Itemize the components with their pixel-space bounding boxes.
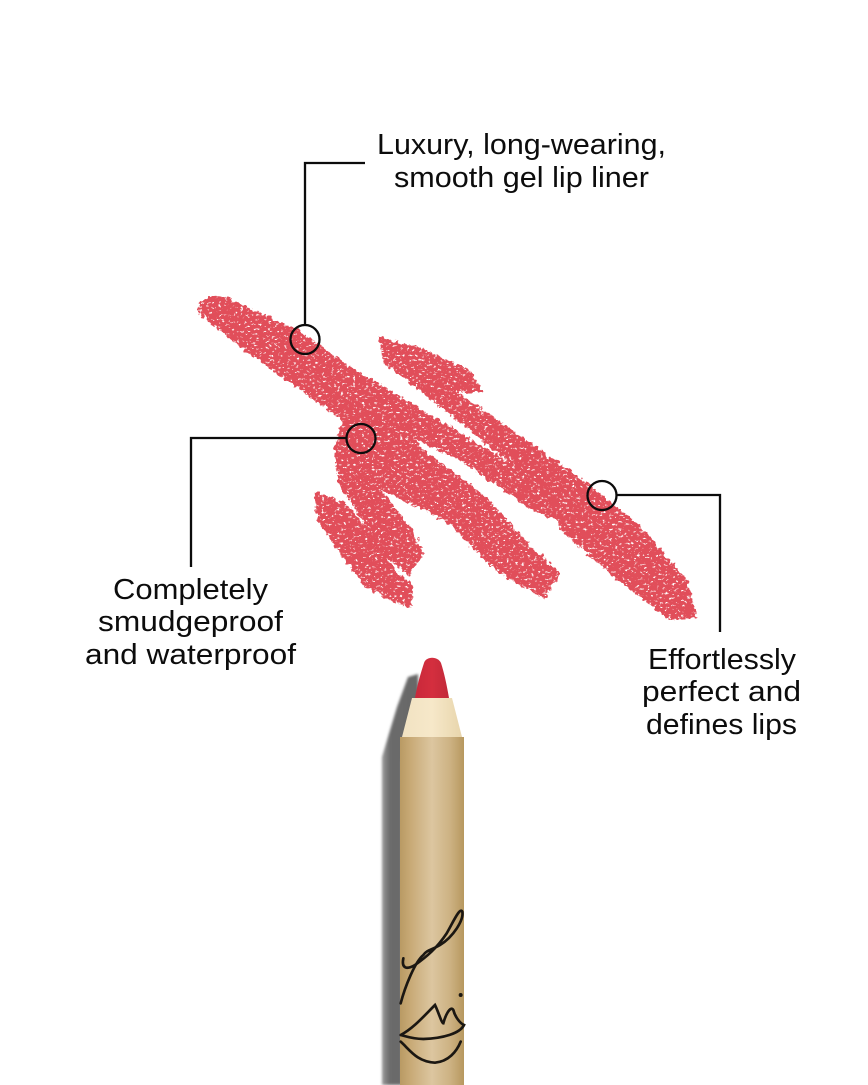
lip liner swatch: [198, 297, 697, 620]
callout text: smudgeproof: [98, 606, 284, 638]
callout text: smooth gel lip liner: [394, 162, 649, 194]
callout text: Completely: [113, 574, 269, 606]
callout text: and waterproof: [85, 639, 297, 671]
callout: luxury gel lip liner: [290, 129, 666, 354]
leader line and marker: [191, 424, 376, 567]
leader line and marker: [588, 481, 720, 632]
callout: smudgeproof and waterproof: [85, 424, 376, 671]
lip liner pencil: [382, 658, 464, 1085]
leader line and marker: [290, 163, 365, 354]
pencil wood: [402, 698, 462, 737]
callout text: perfect and: [642, 676, 801, 708]
callout text: [85, 574, 297, 671]
callout text: [377, 129, 666, 194]
callout text: defines lips: [646, 709, 797, 741]
pencil gold body: [400, 737, 464, 1085]
callout: effortlessly perfect: [588, 481, 801, 741]
callout text: Effortlessly: [648, 644, 797, 676]
pencil shadow: [382, 674, 420, 1085]
pencil lead tip: [415, 658, 449, 698]
pencil logo: [401, 911, 464, 1063]
callout text: [642, 644, 801, 741]
callout text: Luxury, long-wearing,: [377, 129, 666, 161]
